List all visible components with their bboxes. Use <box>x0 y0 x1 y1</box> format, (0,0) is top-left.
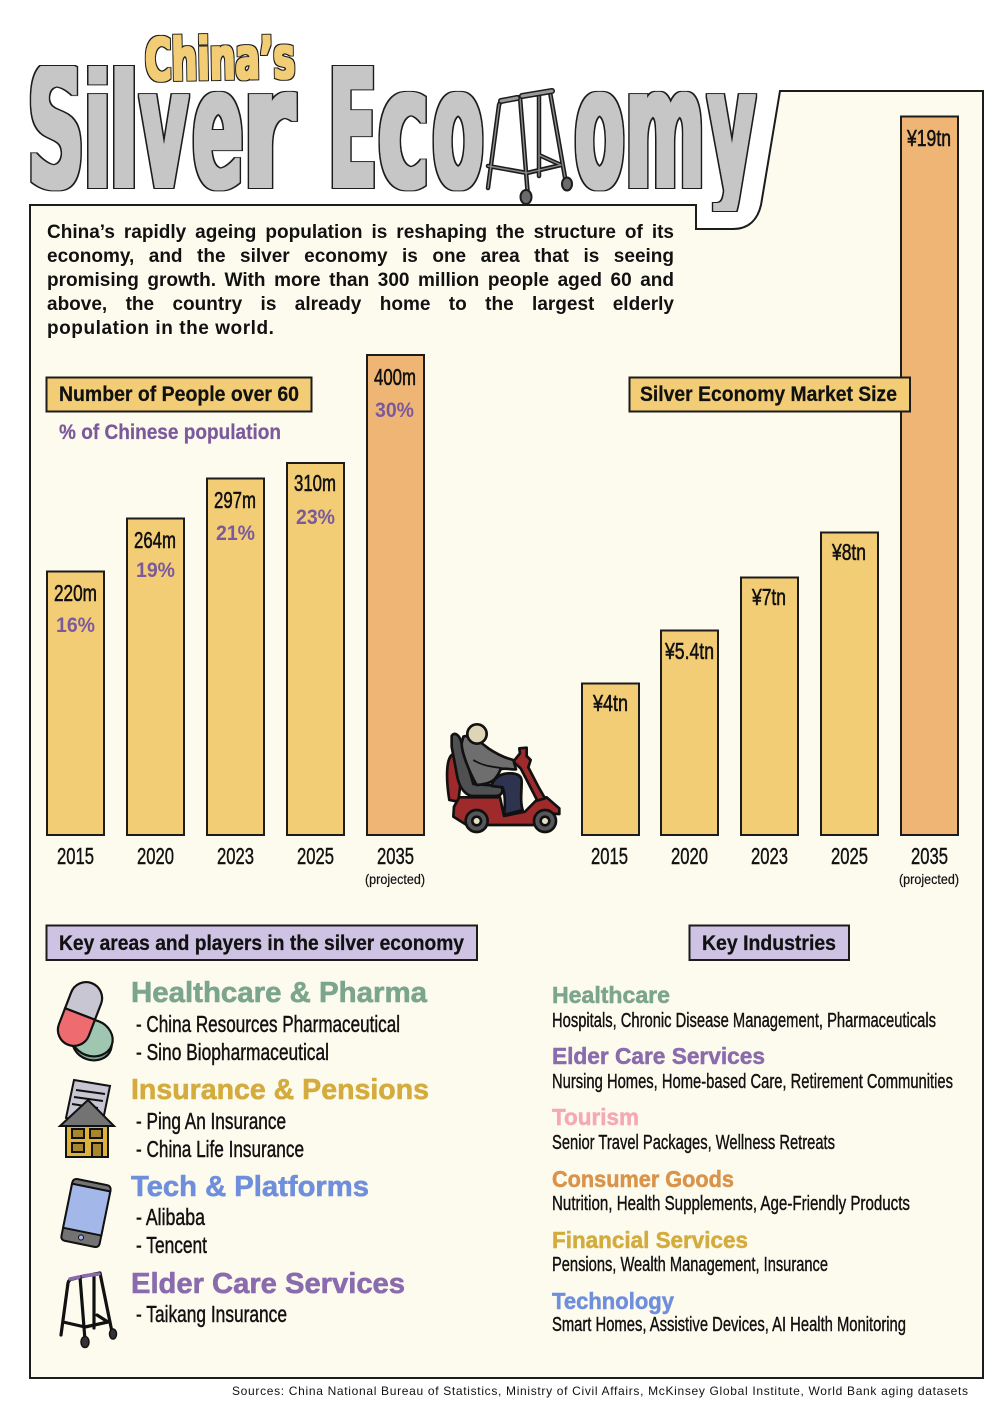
intro paragraph: above, the country is already home to the largest elderly <box>47 294 674 315</box>
title: Silver Economy: S <box>28 31 84 227</box>
intro paragraph <box>47 221 674 343</box>
bar: 2020: 19% <box>136 559 175 582</box>
bar: 2023: 297m <box>214 487 256 513</box>
icon: mobility scooter <box>447 724 559 832</box>
bar chart: people over 60 <box>47 355 425 887</box>
title: Silver Economy: E <box>329 31 377 227</box>
intro paragraph: population in the world. <box>47 318 274 339</box>
industry: elder care services <box>552 1043 953 1093</box>
bar: 2020: ¥5.4tn <box>664 638 714 664</box>
group: healthcare and pharma: - Sino Biopharmaceutical <box>136 1039 329 1065</box>
heading: number of people over 60 <box>46 378 312 412</box>
bar: 2020: 2020 <box>137 843 174 869</box>
heading: key areas: Key areas and players in the silver economy <box>59 932 464 955</box>
group: tech and platforms: - Tencent <box>136 1232 207 1258</box>
industry: consumer goods <box>552 1166 910 1215</box>
heading: number of people over 60: Number of People over 60 <box>59 383 299 406</box>
bar: 2025: 310m <box>294 470 336 496</box>
title: Silver Economy <box>30 65 758 212</box>
industry: tourism: Tourism <box>552 1104 639 1130</box>
bar: 2035 projected: 400m <box>374 364 416 390</box>
group: tech and platforms: Tech & Platforms <box>131 1171 369 1203</box>
title: Silver Economy: c <box>378 31 429 227</box>
group: insurance and pensions: - China Life Insurance <box>136 1136 304 1162</box>
bar: 2025: ¥8tn <box>831 539 866 565</box>
bar: 2020 <box>661 630 718 869</box>
group: tech and platforms: - Alibaba <box>136 1204 205 1230</box>
sources: Sources: China National Bureau of Statistics, Ministry of Civil Affairs, McKinsey Global Institute, World Bank aging datasets <box>232 1384 968 1398</box>
group: insurance and pensions: Insurance & Pensions <box>131 1074 429 1106</box>
bar: 2035 projected <box>899 116 959 887</box>
intro paragraph: promising growth. With more than 300 million people aged 60 and <box>47 270 674 291</box>
bar: 2025: 23% <box>296 506 335 529</box>
bar: 2035 projected: 30% <box>375 399 414 422</box>
intro paragraph: economy, and the silver economy is one area that is seeing <box>47 246 674 267</box>
bar: 2035 projected: 2035 <box>377 843 414 869</box>
bar: 2025: 2025 <box>831 843 868 869</box>
bar: 2035 projected: (projected) <box>899 871 959 887</box>
bar: 2035 projected: (projected) <box>365 871 425 887</box>
bar: 2025: 2025 <box>297 843 334 869</box>
icon: pills <box>53 977 118 1066</box>
title: Silver Economy: v <box>140 31 188 227</box>
list: key industries <box>552 982 953 1336</box>
bar: 2035 projected: 2035 <box>911 843 948 869</box>
group: insurance and pensions <box>131 1074 429 1162</box>
industry: elder care services: Elder Care Services <box>552 1043 765 1069</box>
icon: walker <box>61 1273 116 1348</box>
group: healthcare and pharma <box>131 977 428 1065</box>
title: Silver Economy: i <box>84 31 111 227</box>
bar: 2023: 21% <box>216 522 255 545</box>
industry: tourism: Senior Travel Packages, Wellness Retreats <box>552 1132 835 1154</box>
industry: technology: Technology <box>552 1288 674 1314</box>
title: Silver Economy: e <box>193 31 243 227</box>
group: elder care services <box>131 1268 405 1327</box>
title: Silver Economy: r <box>242 31 295 227</box>
industry: tourism <box>552 1104 835 1154</box>
bar: 2025 <box>821 532 878 869</box>
industry: healthcare <box>552 982 936 1032</box>
title: China's: China’s <box>144 24 296 94</box>
bar chart: market size <box>582 116 959 887</box>
title: Silver Economy: m <box>625 31 705 227</box>
title <box>30 33 758 212</box>
bar: 2015: 220m <box>54 580 97 606</box>
text: y <box>708 31 755 227</box>
bar: 2015 <box>582 684 639 869</box>
bar: 2023 <box>207 478 264 869</box>
bar: 2015: 2015 <box>57 843 94 869</box>
icon: smartphone <box>61 1178 111 1248</box>
bar: 2020: 2020 <box>671 843 708 869</box>
industry: financial services: Pensions, Wealth Management, Insurance <box>552 1254 828 1276</box>
industry: financial services <box>552 1227 828 1276</box>
industry: consumer goods: Consumer Goods <box>552 1166 734 1192</box>
bar: 2035 projected <box>365 355 425 887</box>
bar: 2015: 16% <box>56 614 95 637</box>
group: elder care services: Elder Care Services <box>131 1268 405 1300</box>
icon: house with document <box>60 1080 114 1157</box>
icon: walker in title <box>488 91 572 204</box>
industry: healthcare: Healthcare <box>552 982 670 1008</box>
industry: financial services: Financial Services <box>552 1227 748 1253</box>
heading: key areas <box>46 926 477 960</box>
bar: 2035 projected: ¥19tn <box>906 125 951 151</box>
title: Silver Economy: l <box>109 31 139 227</box>
heading: silver economy market size: Silver Economy Market Size <box>640 383 897 406</box>
group: tech and platforms <box>131 1171 369 1258</box>
bar: 2023: 2023 <box>217 843 254 869</box>
group: insurance and pensions: - Ping An Insurance <box>136 1108 286 1134</box>
bar: 2023: ¥7tn <box>751 584 786 610</box>
heading: silver economy market size <box>630 378 910 412</box>
legend: percent of population: % of Chinese population <box>59 421 281 444</box>
bar: 2025 <box>287 463 344 869</box>
bar: 2023: 2023 <box>751 843 788 869</box>
heading: key industries <box>690 926 849 960</box>
title: Silver Economy: o <box>433 31 483 227</box>
bar: 2023 <box>741 578 798 869</box>
title: Silver Economy: o <box>575 31 624 227</box>
bar: 2020 <box>127 518 184 869</box>
bar: 2015: ¥4tn <box>592 690 628 716</box>
intro paragraph: China’s rapidly ageing population is reshaping the structure of its <box>47 222 674 243</box>
bar: 2020: 264m <box>134 527 176 553</box>
bar: 2015 <box>47 572 104 869</box>
heading: key industries: Key Industries <box>702 932 836 955</box>
bar: 2015: 2015 <box>591 843 628 869</box>
list: key players <box>131 977 429 1327</box>
group: healthcare and pharma: - China Resources Pharmaceutical <box>136 1011 400 1037</box>
industry: technology <box>552 1288 906 1336</box>
group: elder care services: - Taikang Insurance <box>136 1301 287 1327</box>
group: healthcare and pharma: Healthcare & Pharma <box>131 977 428 1009</box>
